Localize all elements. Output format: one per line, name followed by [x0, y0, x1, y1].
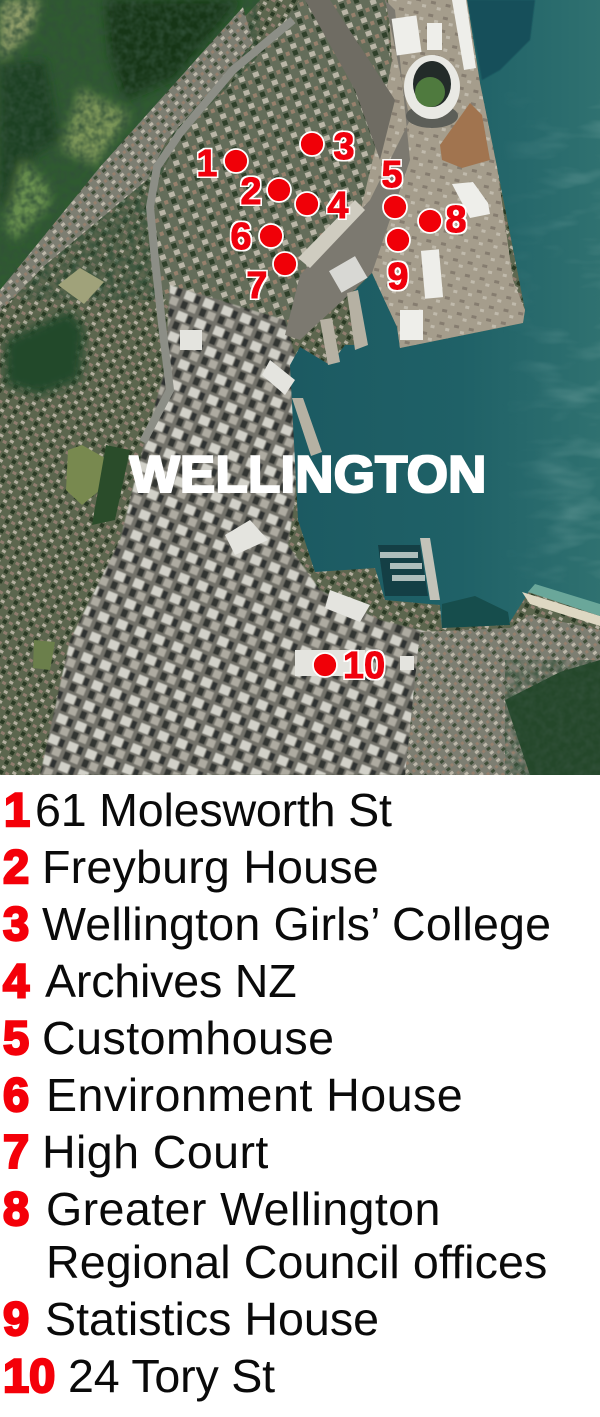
- legend list: [2, 783, 551, 1402]
- marker numbers: 6: [230, 216, 252, 258]
- item 7: 7: [3, 1125, 29, 1178]
- lower-left greenery: [5, 310, 85, 395]
- marker numbers: 7: [246, 265, 268, 307]
- green fields: [66, 445, 105, 505]
- item 8: 8: [3, 1182, 29, 1235]
- port buildings: [392, 0, 490, 340]
- location markers: [224, 132, 442, 677]
- stadium: [404, 55, 460, 128]
- container yard: [440, 103, 490, 168]
- item 8: Greater Wellington: [46, 1183, 441, 1235]
- central city: [40, 285, 440, 775]
- marker numbers: 4: [327, 185, 349, 227]
- marker numbers: 10: [343, 645, 385, 687]
- marker numbers: 8: [445, 199, 467, 241]
- piers: [292, 290, 368, 456]
- marker numbers: 1: [196, 143, 218, 185]
- item 5: Customhouse: [42, 1012, 334, 1064]
- item 2: Freyburg House: [42, 841, 379, 893]
- motorway: [143, 20, 293, 442]
- item 1: 61 Molesworth St: [35, 784, 392, 836]
- rail yard: [285, 0, 410, 340]
- marinas: [378, 545, 428, 596]
- marker numbers: [196, 126, 467, 687]
- water ripples: [521, 106, 600, 576]
- beach: [522, 592, 600, 626]
- marker numbers: 3: [333, 126, 355, 168]
- item 7: High Court: [42, 1126, 269, 1178]
- northern suburb block: [152, 0, 395, 330]
- white city buildings: [180, 330, 414, 676]
- hillside suburb strip: [0, 7, 253, 312]
- forest texture: [0, 0, 260, 300]
- item 2: 2: [3, 840, 29, 893]
- eastern suburb: [405, 615, 600, 775]
- item 6: 6: [3, 1068, 29, 1121]
- rail sheds: [298, 200, 365, 268]
- item 10: 10: [3, 1349, 55, 1402]
- base land: [0, 0, 600, 775]
- item 4: Archives NZ: [45, 955, 297, 1007]
- item 9: Statistics House: [45, 1293, 379, 1345]
- marker numbers: 2: [240, 171, 262, 213]
- item 6: Environment House: [46, 1069, 463, 1121]
- satellite map of Wellington: [0, 0, 600, 775]
- item 3: Wellington Girls’ College: [42, 898, 551, 950]
- port land: [350, 0, 525, 348]
- marker numbers: 9: [387, 256, 409, 298]
- tan field: [58, 268, 104, 304]
- marker numbers: 5: [381, 154, 403, 196]
- map title: WELLINGTON: [130, 446, 486, 504]
- item 9: 9: [3, 1292, 29, 1345]
- forest tone patches: [0, 0, 240, 240]
- forest hills: [0, 0, 260, 300]
- item 1: 1: [4, 783, 30, 836]
- harbour water: [290, 0, 600, 628]
- item 8: Regional Council offices: [46, 1236, 547, 1288]
- item 3: 3: [3, 897, 29, 950]
- item 5: 5: [3, 1011, 29, 1064]
- item 8: [3, 1182, 547, 1288]
- item 4: 4: [3, 954, 29, 1007]
- item 10: 24 Tory St: [68, 1350, 275, 1402]
